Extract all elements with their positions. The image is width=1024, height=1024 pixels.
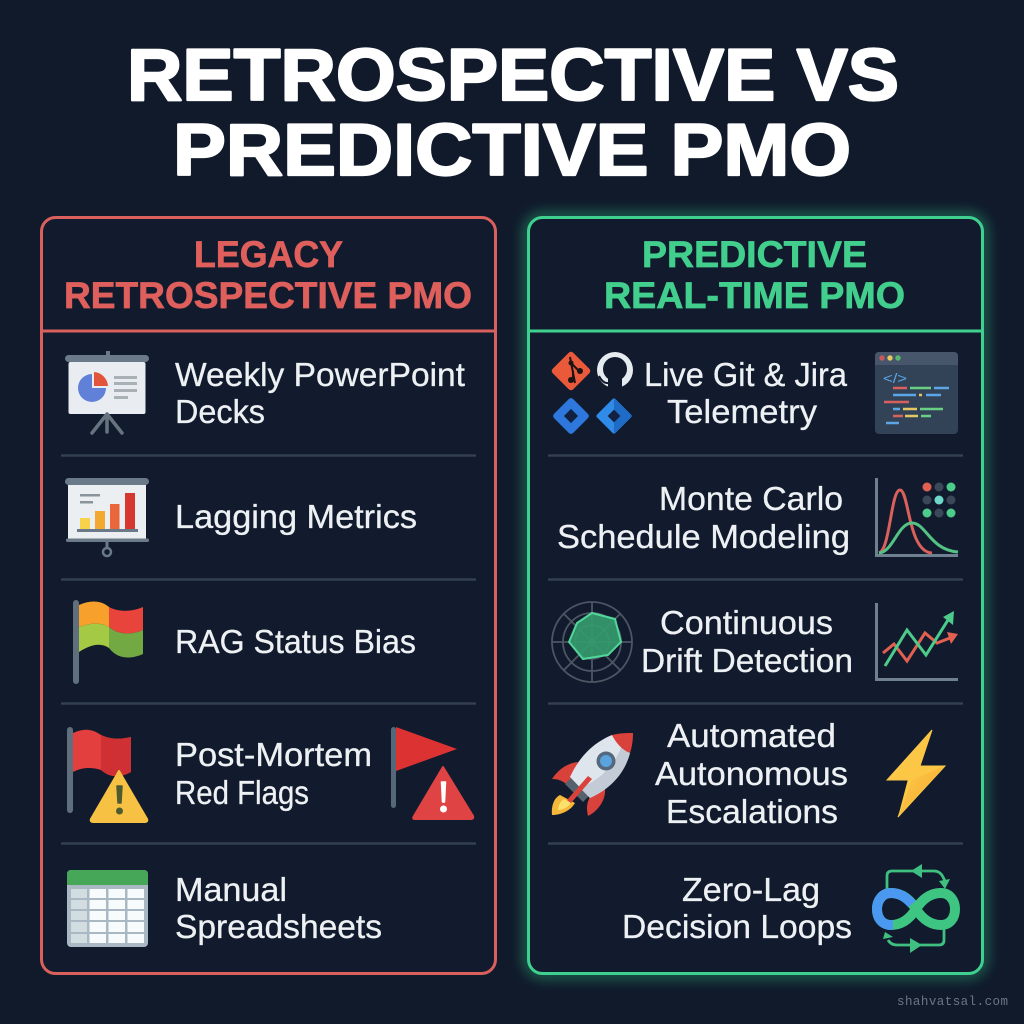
text: automated autonomous escalations: Escalations <box>666 793 838 830</box>
icon: code window: </> <box>883 370 907 386</box>
icon: radar chart <box>552 602 632 682</box>
title: PREDICTIVE PMO <box>173 110 851 191</box>
text: zero-lag decision loops: Decision Loops <box>622 908 852 945</box>
panel: predictive real-time PMO <box>528 218 983 974</box>
heading: legacy retrospective PMO: LEGACY <box>194 234 343 275</box>
text: live Git and Jira telemetry: Telemetry <box>667 393 818 430</box>
text: zero-lag decision loops: Zero-Lag <box>682 871 820 908</box>
text: automated autonomous escalations: Autonomous <box>655 755 848 792</box>
text: automated autonomous escalations <box>655 717 848 830</box>
text: manual spreadsheets: Spreadsheets <box>175 908 382 945</box>
text: manual spreadsheets <box>175 871 382 945</box>
text: manual spreadsheets: Manual <box>175 871 287 908</box>
heading: legacy retrospective PMO <box>64 234 472 316</box>
heading: predictive real-time PMO: REAL-TIME PMO <box>604 275 905 316</box>
text: continuous drift detection: Continuous <box>660 604 833 641</box>
text: Monte Carlo schedule modeling: Schedule Modeling <box>557 518 850 555</box>
icon: red flag with yellow warning <box>67 727 147 822</box>
text: post-mortem red flags: Post-Mortem <box>175 736 372 773</box>
icon: Monte Carlo distribution chart <box>876 478 958 556</box>
title <box>127 35 899 191</box>
text: continuous drift detection <box>641 604 853 679</box>
text: Monte Carlo schedule modeling: Monte Carlo <box>659 480 843 517</box>
text: weekly PowerPoint decks <box>175 356 465 430</box>
icon: presentation with pie chart <box>65 351 149 433</box>
icon: Git, GitHub and Jira logos <box>550 350 633 435</box>
text: zero-lag decision loops <box>622 871 852 945</box>
icon: drift line chart <box>876 603 958 680</box>
icon: spreadsheet <box>67 870 148 947</box>
text: live Git and Jira telemetry: Live Git & Jira <box>644 356 848 393</box>
heading: predictive real-time PMO <box>604 234 905 316</box>
text: post-mortem red flags: Red Flags <box>175 774 309 811</box>
text: lagging metrics: Lagging Metrics <box>175 498 417 535</box>
title: RETROSPECTIVE VS <box>127 35 899 116</box>
icon: lightning bolt <box>887 730 945 817</box>
icon: triangular red flag with red warning <box>391 727 473 819</box>
heading: legacy retrospective PMO: RETROSPECTIVE PMO <box>64 275 472 316</box>
icon: RAG status flag <box>73 600 143 684</box>
icon: presentation with rising bars <box>65 478 149 556</box>
text: live Git and Jira telemetry <box>644 356 848 430</box>
icon: rocket <box>552 733 633 816</box>
text: continuous drift detection: Drift Detection <box>641 642 853 679</box>
text: weekly PowerPoint decks: Decks <box>175 393 265 430</box>
text: post-mortem red flags <box>175 736 372 811</box>
text: Monte Carlo schedule modeling <box>557 480 850 555</box>
text: RAG status bias: RAG Status Bias <box>175 623 416 660</box>
panel: legacy retrospective PMO <box>41 218 496 974</box>
text: automated autonomous escalations: Automated <box>667 717 836 754</box>
watermark: shahvatsal.com <box>897 995 1008 1009</box>
icon: infinity loop with arrows <box>877 864 955 953</box>
text: weekly PowerPoint decks: Weekly PowerPoint <box>175 356 465 393</box>
heading: predictive real-time PMO: PREDICTIVE <box>642 234 867 275</box>
icon: code window <box>875 352 958 434</box>
